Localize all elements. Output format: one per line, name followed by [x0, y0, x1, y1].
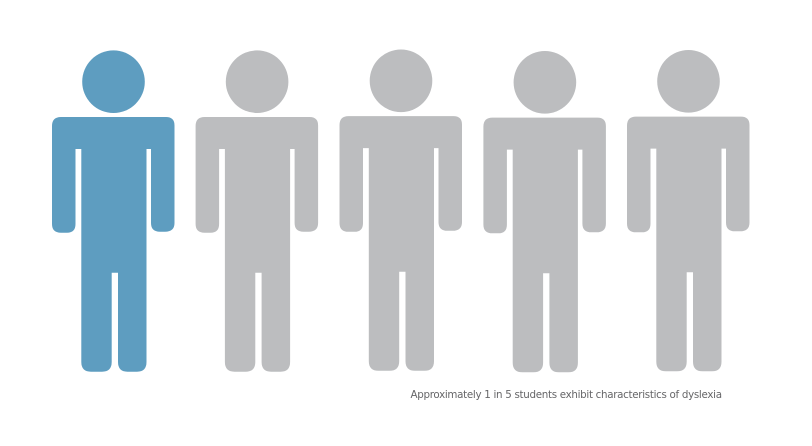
figure 2: grey person: [196, 50, 318, 372]
figure 4: grey person: [483, 51, 606, 372]
caption: Approximately 1 in 5 students exhibit characteristics of dyslexia: [410, 389, 722, 401]
figure 5: grey person: [627, 50, 750, 371]
figure 3: grey person: [340, 49, 462, 371]
figure 1: highlighted blue person: [52, 50, 174, 372]
